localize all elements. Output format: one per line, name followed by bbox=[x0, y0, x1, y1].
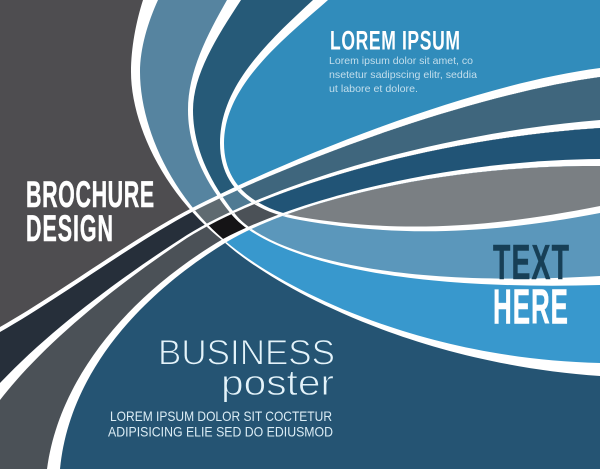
heading: text here: HERE bbox=[493, 281, 568, 335]
heading: business poster: poster bbox=[221, 362, 334, 403]
panel: second diagonal band bbox=[0, 128, 600, 469]
text block: business tagline bbox=[108, 408, 333, 440]
heading: brochure design bbox=[26, 175, 154, 250]
white curve: third crossing line bbox=[47, 159, 600, 469]
panel: lower blue areas and grey lens bbox=[60, 166, 600, 469]
heading: lorem ipsum: LOREM IPSUM bbox=[330, 25, 460, 55]
heading: brochure design: DESIGN bbox=[26, 209, 113, 250]
heading: brochure design: BROCHURE bbox=[26, 175, 154, 216]
text block: lorem ipsum description: ut labore et dolore. bbox=[329, 83, 418, 95]
text block: lorem ipsum description: Lorem ipsum dolor sit amet, co bbox=[329, 55, 473, 67]
panel: first diagonal band bbox=[0, 77, 600, 383]
heading: business poster bbox=[158, 334, 335, 403]
heading: text here bbox=[493, 236, 569, 335]
text block: business tagline: LOREM IPSUM DOLOR SIT COCTETUR bbox=[110, 408, 332, 424]
white curve: second crossing line bbox=[0, 120, 600, 469]
text block: lorem ipsum description bbox=[329, 55, 477, 95]
heading: business poster: BUSINESS bbox=[158, 334, 335, 372]
text block: lorem ipsum description: nsetetur sadipscing elitr, seddia bbox=[329, 69, 477, 81]
heading: text here: TEXT bbox=[493, 236, 569, 290]
text block: business tagline: ADIPISICING ELIE SED DO EDIUSMOD bbox=[108, 424, 333, 440]
